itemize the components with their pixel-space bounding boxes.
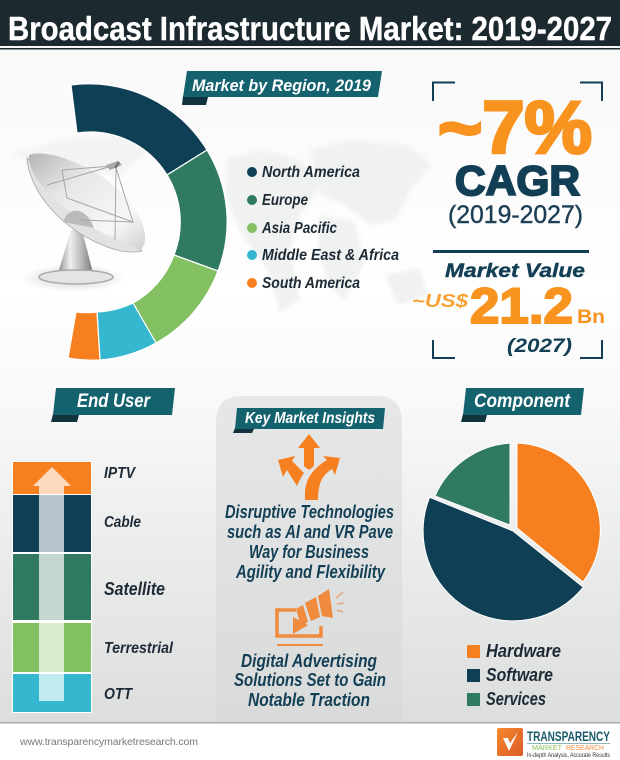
banner: component: [461, 388, 584, 422]
legend: component: [467, 641, 561, 709]
website url: www.transparencymarketresearch.com: [19, 736, 198, 748]
labels: end user: IPTV: [104, 465, 136, 482]
text: insight one: Disruptive Technologies: [225, 502, 394, 522]
market value unit: Bn: [577, 307, 605, 328]
footer: [0, 722, 620, 760]
text: insight one: Agility and Flexibility: [235, 562, 386, 582]
cagr period: (2019-2027): [448, 201, 583, 229]
text: insight one: such as AI and VR Pave: [227, 522, 393, 542]
market value number: 21.2: [470, 278, 573, 334]
world map backdrop: [10, 135, 432, 312]
legend item: services: Services: [486, 689, 546, 709]
cagr label: CAGR: [455, 157, 580, 204]
legend item: software: Software: [486, 665, 553, 685]
legend item: europe: Europe: [262, 192, 308, 209]
donut chart: market by region: [68, 84, 227, 360]
text: insight two: Digital Advertising: [241, 651, 377, 671]
banner: key market insights: Key Market Insights: [245, 410, 375, 427]
text: insight one: [225, 502, 394, 582]
banner: end user: [51, 388, 175, 422]
legend item: middle east and africa: Middle East & Africa: [262, 247, 399, 264]
labels: end user: Satellite: [104, 579, 165, 599]
text: insight one: Way for Business: [249, 542, 369, 562]
arrow overlay: [33, 467, 71, 701]
market value year: (2027): [507, 336, 572, 357]
pie chart: component: [423, 443, 600, 621]
banner: end user: End User: [77, 391, 151, 412]
legend item: europe: [247, 192, 308, 209]
legend item: south america: South America: [262, 275, 360, 292]
logo: [497, 728, 611, 759]
market value label: Market Value: [445, 261, 586, 282]
legend item: north america: North America: [262, 164, 360, 181]
icon: satellite dish: [21, 154, 145, 292]
logo: RESEARCH: [566, 745, 604, 752]
callout: cagr and market value: [412, 82, 605, 358]
panel: key market insights: [216, 396, 402, 723]
cagr value: ~7%: [438, 86, 592, 169]
labels: end user: [104, 465, 174, 703]
labels: end user: Terrestrial: [104, 640, 174, 657]
banner: component: Component: [474, 391, 571, 412]
legend item: hardware: Hardware: [486, 641, 561, 661]
banner: key market insights: [233, 408, 385, 433]
labels: end user: OTT: [104, 686, 133, 703]
legend: regions: [247, 164, 399, 292]
logo: MARKET: [532, 745, 563, 752]
banner: market by region: [182, 71, 382, 105]
labels: end user: Cable: [104, 514, 141, 531]
stacked bar: end user: [12, 461, 92, 713]
icon: video advertising megaphone: [277, 589, 344, 646]
legend item: asia pacific: Asia Pacific: [261, 220, 337, 237]
text: insight two: Solutions Set to Gain: [234, 670, 386, 690]
market value currency: ~US$: [412, 291, 469, 311]
icon: diverging arrows: [278, 434, 340, 500]
text: insight two: Notable Traction: [248, 690, 370, 710]
banner: market by region: Market by Region, 2019: [192, 76, 372, 95]
text: insight two: [234, 651, 386, 710]
